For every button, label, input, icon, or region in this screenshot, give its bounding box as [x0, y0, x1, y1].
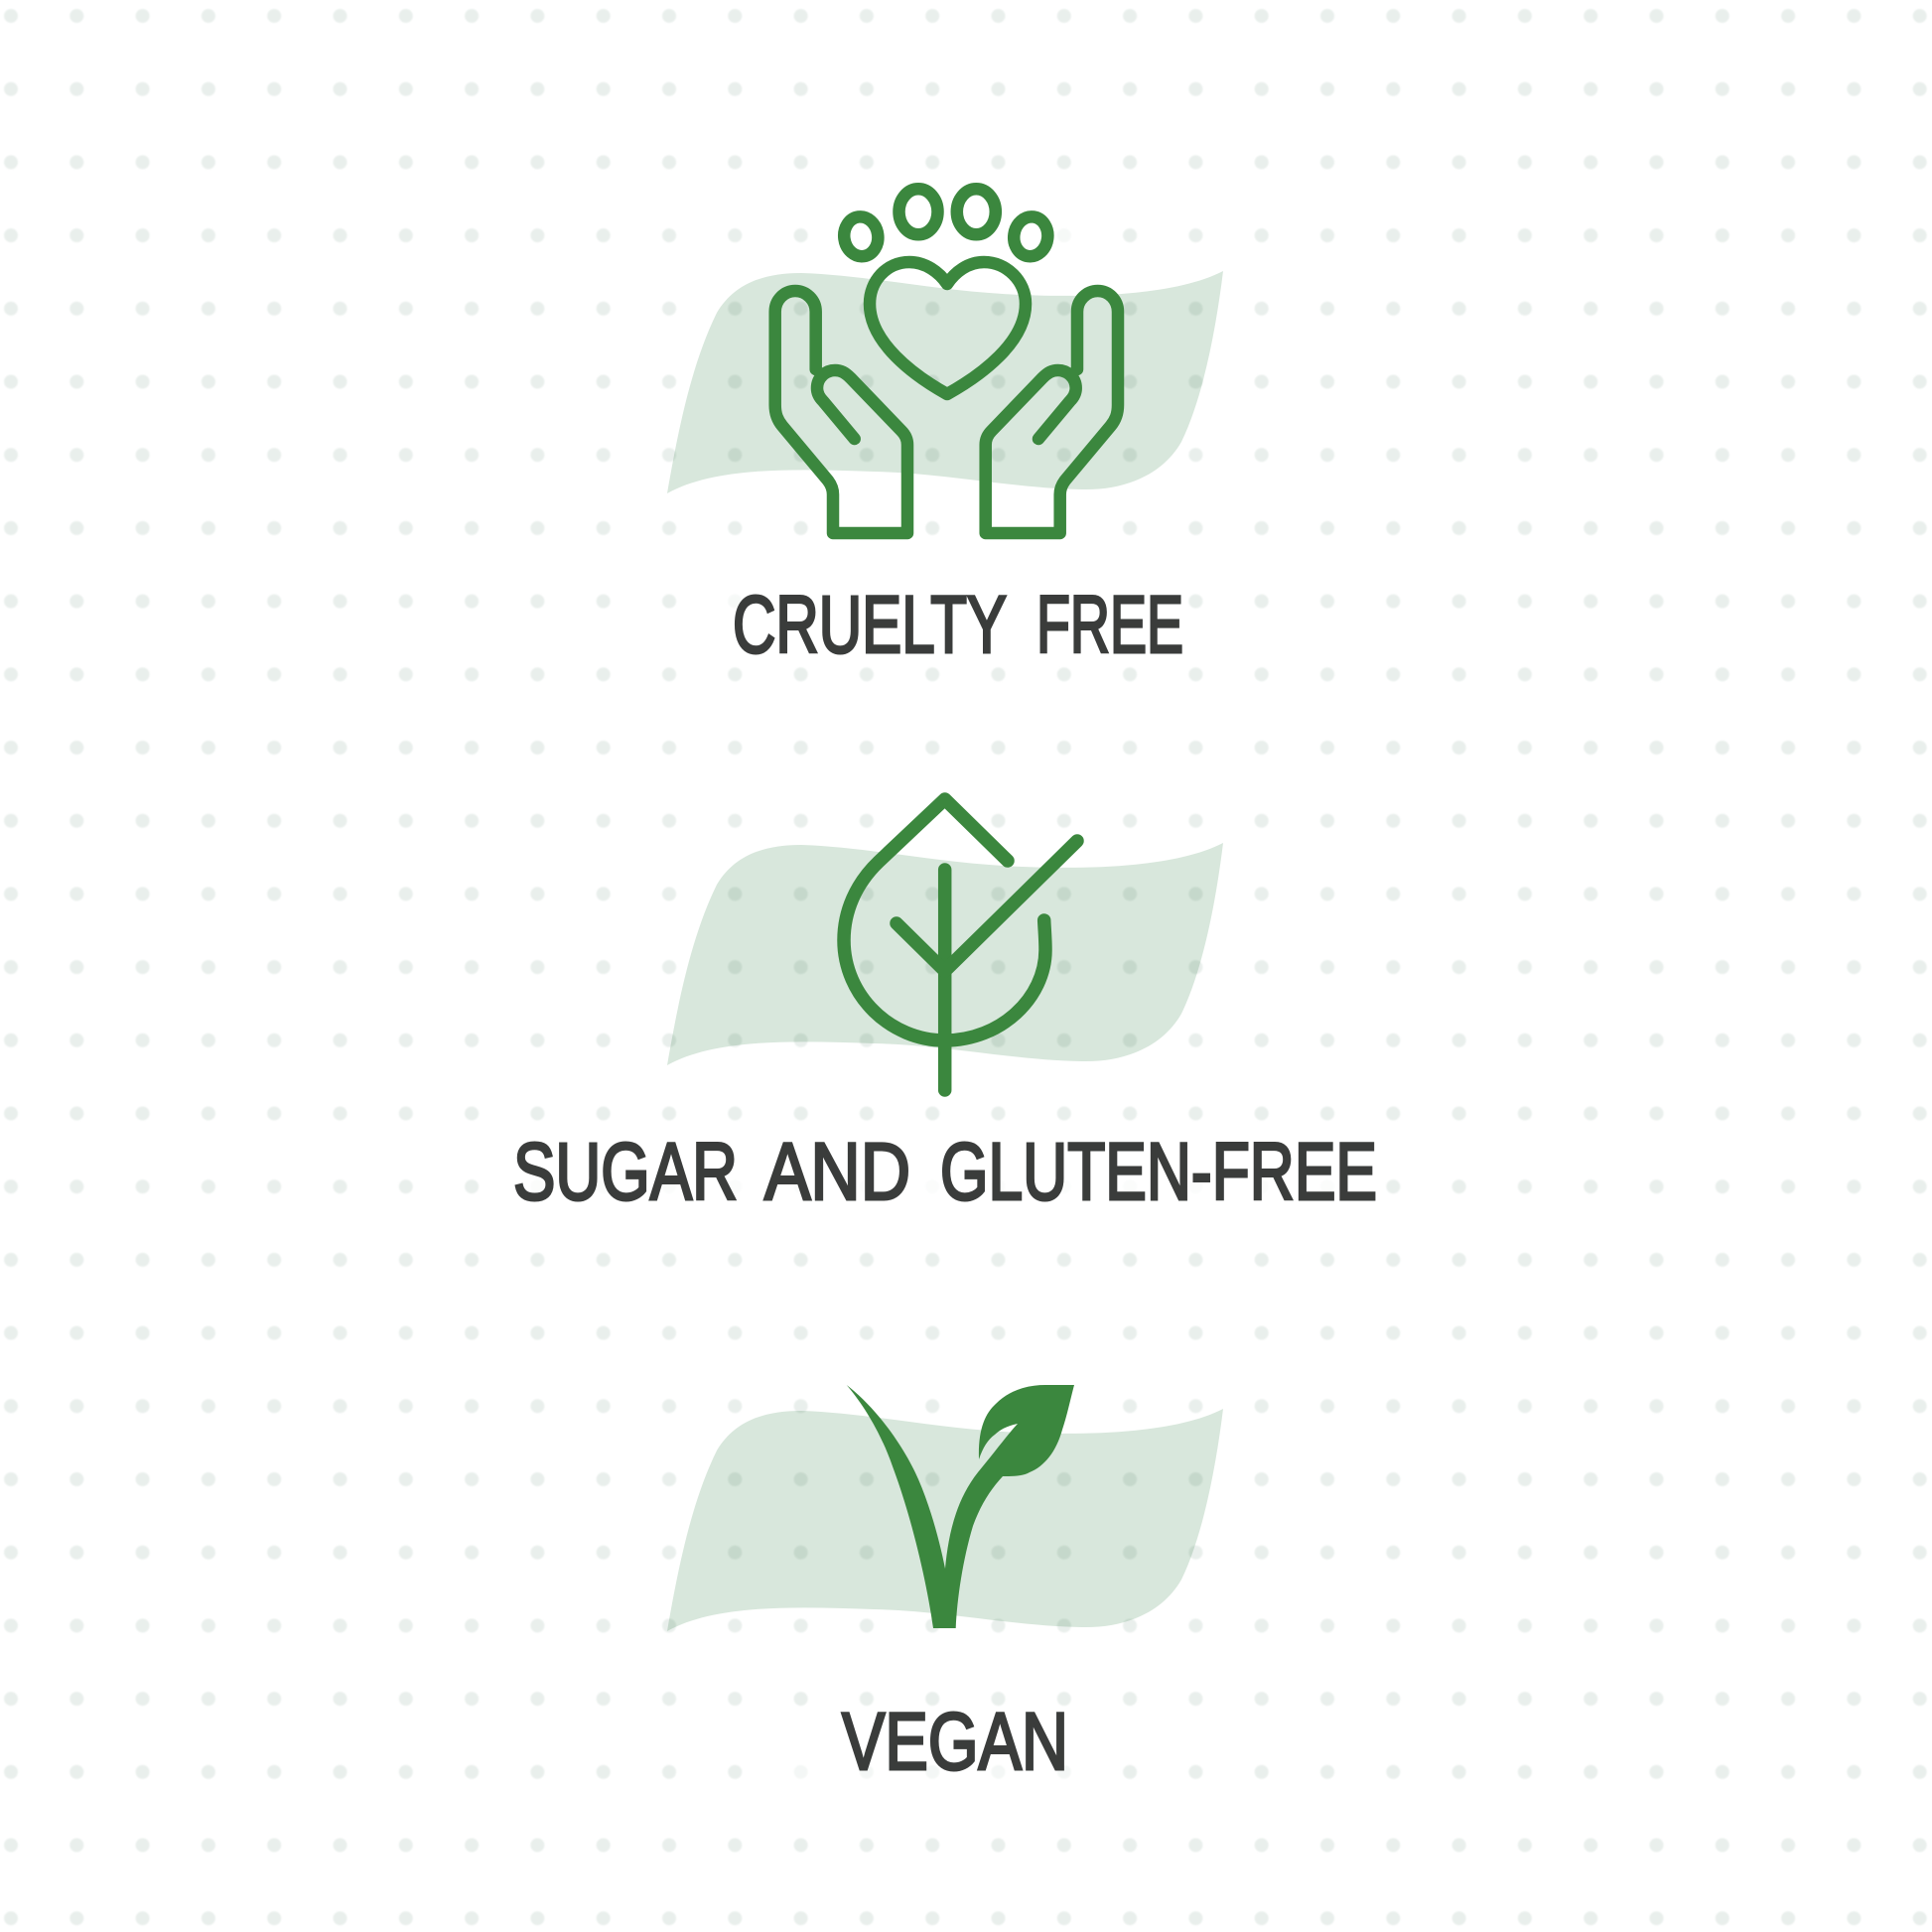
- label: sugar and gluten-free: [513, 1127, 1377, 1217]
- background flag: vegan: [667, 1409, 1223, 1631]
- background flag: sugar and gluten-free: [667, 843, 1223, 1065]
- icon part: leaf outline: [844, 799, 1045, 1040]
- label: vegan: VEGAN: [842, 1697, 1068, 1787]
- label: sugar and gluten-free: GLUTEN-FREE: [940, 1127, 1377, 1217]
- label: cruelty free: CRUELTY: [733, 580, 1007, 670]
- label: sugar and gluten-free: AND: [764, 1127, 910, 1217]
- icon part: heart: [870, 262, 1026, 394]
- icon: paw with heart held by hands: [775, 189, 1118, 533]
- label: cruelty free: FREE: [1036, 580, 1183, 670]
- icon part: check mark: [897, 841, 1077, 971]
- icon: vegan sprout: [847, 1385, 1074, 1628]
- panel: cruelty free: [667, 189, 1223, 670]
- icon part: paw toes: [842, 189, 1050, 258]
- panel: vegan: [667, 1385, 1223, 1787]
- icon part: left hand: [775, 291, 907, 533]
- icon part: right hand: [986, 291, 1118, 533]
- icon part: stem: [938, 870, 951, 1090]
- background flag: cruelty free: [667, 271, 1223, 493]
- label: sugar and gluten-free: SUGAR: [513, 1127, 738, 1217]
- panel: sugar and gluten-free: [513, 799, 1377, 1217]
- icon: leaf with check mark: [844, 799, 1077, 1090]
